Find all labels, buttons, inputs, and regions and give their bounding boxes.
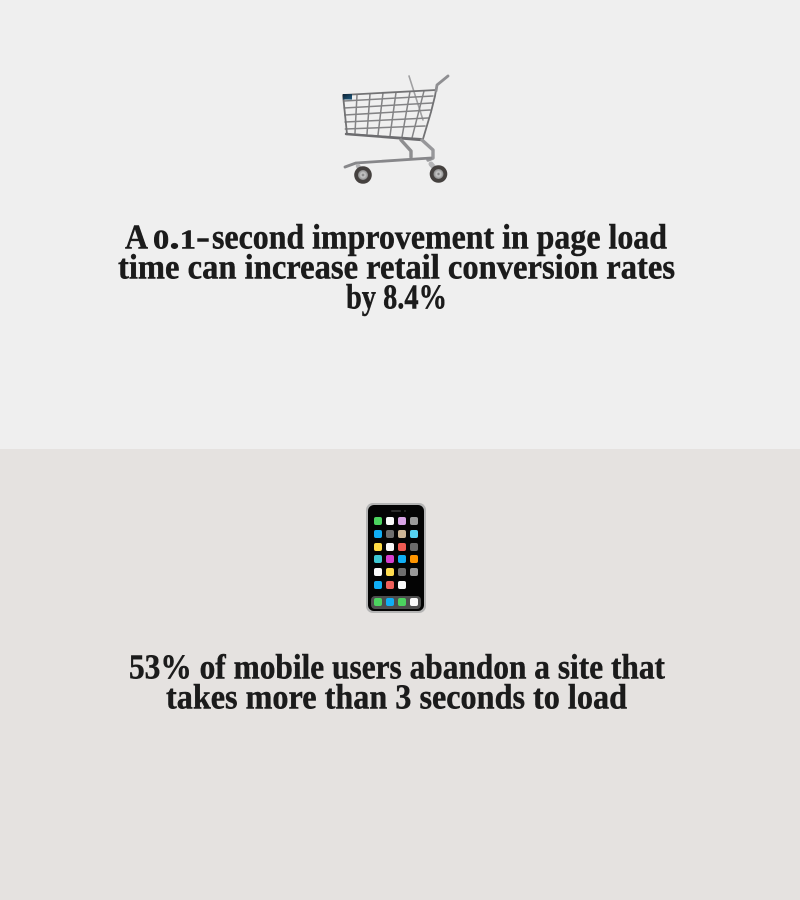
icon: shopping cart [343,76,448,184]
heading: mobile statistic [129,648,665,716]
app icons [374,517,418,589]
heading: page load statistic: 0.1- [153,218,210,256]
panel: mobile abandonment [0,449,800,900]
heading: mobile statistic: takes more than 3 seconds to load [166,678,627,716]
heading: page load statistic: second improvement in page load [212,218,667,256]
dock [371,596,421,609]
heading: mobile statistic: 53% of mobile users abandon a site that [129,648,665,686]
heading: page load statistic: time can increase retail conversion rates [118,248,675,286]
heading: page load statistic [118,218,675,316]
icon: smartphone [366,503,426,613]
heading: page load statistic: A [125,218,149,256]
heading: page load statistic: by 8.4% [346,278,447,316]
panel: retail conversion [0,0,800,449]
